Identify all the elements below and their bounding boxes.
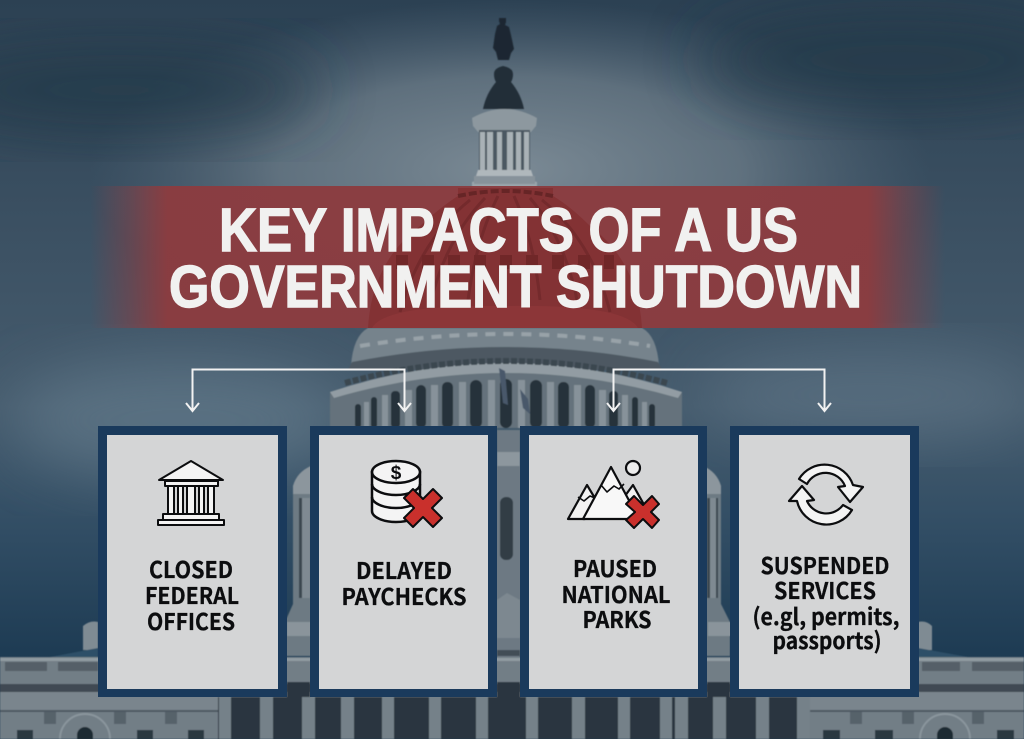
icon: government building xyxy=(158,461,224,525)
label: passports) xyxy=(772,622,882,656)
label: CLOSED xyxy=(149,551,233,585)
label: PARKS xyxy=(582,601,652,635)
main building xyxy=(0,657,1024,739)
flags xyxy=(499,368,530,414)
central portico xyxy=(218,697,810,739)
title xyxy=(169,196,862,320)
statue of freedom xyxy=(483,18,524,109)
label xyxy=(562,550,670,635)
lantern xyxy=(472,109,537,188)
title: KEY IMPACTS OF A US xyxy=(219,196,798,264)
label: PAYCHECKS xyxy=(342,578,466,612)
central facade xyxy=(497,430,520,682)
label: FEDERAL xyxy=(145,577,239,611)
lower drum xyxy=(285,466,730,656)
title: GOVERNMENT SHUTDOWN xyxy=(169,254,862,320)
wing windows xyxy=(17,730,1014,739)
label: OFFICES xyxy=(147,603,235,637)
panel: closed federal offices xyxy=(98,426,287,697)
panel: suspended services xyxy=(730,426,919,697)
icon: coins with red cross xyxy=(372,461,442,527)
label: NATIONAL xyxy=(562,576,670,610)
arrows: bracket left xyxy=(186,370,411,411)
icon: coins with red cross: $ xyxy=(391,463,402,484)
wing domes xyxy=(83,622,932,650)
icon: circular arrows xyxy=(789,465,863,525)
title banner xyxy=(90,186,945,328)
label xyxy=(145,551,239,637)
label xyxy=(342,552,466,612)
icon: mountains with red cross xyxy=(568,461,659,528)
label: DELAYED xyxy=(356,552,452,586)
panel: paused national parks xyxy=(520,426,707,697)
dome base and peristyle xyxy=(351,328,659,366)
dome seen through banner xyxy=(368,188,642,328)
wreaths xyxy=(44,712,984,724)
label: (e.gl, permits, xyxy=(752,598,900,632)
panel: delayed paychecks xyxy=(310,426,497,697)
arrows: bracket right xyxy=(607,370,831,411)
label: SERVICES xyxy=(774,572,876,606)
label xyxy=(752,547,900,656)
peristyle windows xyxy=(355,379,655,428)
peristyle pilasters xyxy=(364,380,647,428)
label: SUSPENDED xyxy=(760,547,890,581)
label: PAUSED xyxy=(573,550,657,584)
